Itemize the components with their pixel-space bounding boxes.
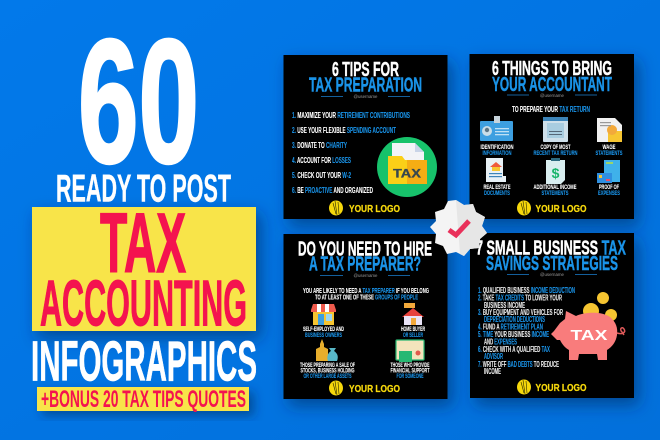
strategies list: AND EXPENSES: [484, 338, 517, 346]
strategies list: 4. FUND A RETIREMENT PLAN: [478, 322, 543, 332]
item: real estate documents: DOCUMENTS: [484, 190, 510, 197]
username: @username: [540, 93, 565, 98]
group: home buyer: [401, 303, 425, 339]
username: @username: [540, 272, 565, 277]
item: copy of recent tax return: RECENT TAX RETURN: [534, 150, 578, 157]
group: self-employed: BUSINESS OWNERS: [305, 332, 342, 339]
text: ACCOUNTING: [40, 266, 247, 340]
item: identification information: [480, 116, 514, 157]
icon: verified badge: [430, 200, 487, 256]
item: copy of recent tax return: COPY OF MOST: [540, 144, 570, 151]
logo: [517, 380, 587, 394]
strategies list: 5. TIME YOUR BUSINESS INCOME: [478, 330, 549, 339]
group: home buyer: OR SELLER: [403, 332, 423, 339]
item: real estate documents: REAL ESTATE: [484, 184, 511, 191]
heading: a tax preparer: A TAX PREPARER?: [309, 254, 421, 276]
tips list: 4. ACCOUNT FOR LOSSES: [292, 155, 351, 165]
icon: piggy bank: [551, 292, 625, 360]
username: @username: [354, 273, 378, 278]
item: copy of recent tax return: [534, 117, 578, 157]
group: self-employed: SELF-EMPLOYED AND: [303, 326, 344, 333]
panel: 6 things to bring your accountant: [470, 54, 634, 219]
group: self-employed: [303, 304, 344, 339]
strategies list: [478, 286, 575, 376]
strategies list: 1. QUALIFIED BUSINESS INCOME DEDUCTION: [478, 286, 575, 295]
intro text: YOU ARE LIKELY TO NEED A TAX PREPARER IF YOU BELONG: [303, 288, 429, 295]
logo: [329, 380, 400, 396]
item: real estate documents: [484, 158, 511, 197]
tips list: [292, 110, 410, 195]
group: financial support: [390, 340, 430, 380]
panel: 6 tips for tax preparation: [284, 55, 448, 219]
heading: tax preparation: TAX PREPARATION: [309, 74, 422, 96]
tips list: 5. CHECK OUT YOUR W-2: [292, 170, 351, 180]
tips list: 1. MAXIMIZE YOUR RETIREMENT CONTRIBUTIONS: [292, 110, 410, 120]
tips list: 3. DONATE TO CHARITY: [292, 140, 347, 150]
item: identification information: INFORMATION: [482, 150, 512, 157]
headline number 60: 60: [78, 4, 199, 200]
item: wage statements: [596, 118, 623, 157]
strategies list: BUSINESS INCOME: [484, 301, 525, 310]
strategies list: INCOME: [484, 367, 501, 376]
group: sale of assets: [300, 339, 355, 380]
username: @username: [354, 94, 378, 99]
panel: 7 small business tax savings strategies: [470, 233, 634, 398]
panel: do you need to hire a tax preparer: [284, 234, 448, 399]
item: proof of expenses: [597, 160, 620, 197]
intro text: [303, 288, 429, 302]
intro text: TO AT LEAST ONE OF THESE GROUPS OF PEOPLE: [315, 294, 418, 302]
logo: YOUR LOGO: [349, 384, 400, 395]
item: additional income statements: $: [552, 165, 560, 181]
group: sale of assets: STOCKS, BUSINESS HOLDING: [300, 368, 354, 374]
title: tax: TAX: [100, 196, 186, 290]
item: proof of expenses: EXPENSES: [598, 190, 620, 197]
logo: [517, 200, 587, 216]
strategies list: DEPRECIATION DEDUCTIONS: [484, 315, 545, 324]
item: additional income statements: ADDITIONAL INCOME: [534, 184, 577, 191]
item: wage statements: WAGE: [602, 144, 616, 151]
group: financial support: FOR SOMEONE: [396, 373, 424, 380]
subtitle: ready to post: READY TO POST: [56, 168, 231, 210]
logo: YOUR LOGO: [349, 204, 400, 215]
bonus banner: [37, 386, 249, 413]
strategies list: ADVISOR: [484, 352, 503, 361]
heading: 6 tips: 6 TIPS FOR: [332, 59, 399, 81]
yellow title box: [32, 196, 256, 340]
icon: tax folder: [377, 137, 437, 197]
group: home buyer: HOME BUYER: [401, 326, 425, 333]
strategies list: 7. WRITE OFF BAD DEBTS TO REDUCE: [478, 360, 559, 369]
group: financial support: FINANCIAL SUPPORT: [390, 368, 430, 374]
icon: tax folder: TAX: [393, 166, 421, 180]
intro line: TO PREPARE YOUR TAX RETURN: [512, 105, 590, 114]
group: sale of assets: THOSE PREPARING A SALE OF: [300, 362, 355, 369]
bonus banner: +BONUS 20 TAX TIPS QUOTES: [41, 386, 246, 413]
heading: do you need to hire: DO YOU NEED TO HIRE: [298, 238, 432, 260]
logo: [329, 200, 400, 216]
group: financial support: THOSE WHO PROVIDE: [390, 362, 430, 369]
strategies list: 3. BUY EQUIPMENT AND VEHICLES FOR: [478, 308, 563, 317]
group: sale of assets: OR OTHER LARGE ASSETS: [304, 373, 352, 380]
icon: piggy bank: TAX: [570, 327, 608, 344]
tips list: 6. BE PROACTIVE AND ORGANIZED: [292, 185, 373, 195]
logo: YOUR LOGO: [536, 383, 587, 394]
item: wage statements: STATEMENTS: [596, 150, 623, 157]
logo: YOUR LOGO: [536, 204, 587, 215]
item: additional income statements: STATEMENTS: [542, 190, 569, 197]
item: proof of expenses: PROOF OF: [599, 184, 619, 191]
title: infographics: INFOGRAPHICS: [31, 330, 257, 394]
item: additional income statements: [534, 158, 577, 197]
tips list: 2. USE YOUR FLEXIBLE SPENDING ACCOUNT: [292, 125, 396, 135]
strategies list: 6. CHECK WITH A QUALIFIED TAX: [478, 345, 550, 354]
strategies list: 2. TAKE TAX CREDITS TO LOWER YOUR: [478, 294, 562, 302]
item: identification information: IDENTIFICATION: [480, 144, 514, 151]
